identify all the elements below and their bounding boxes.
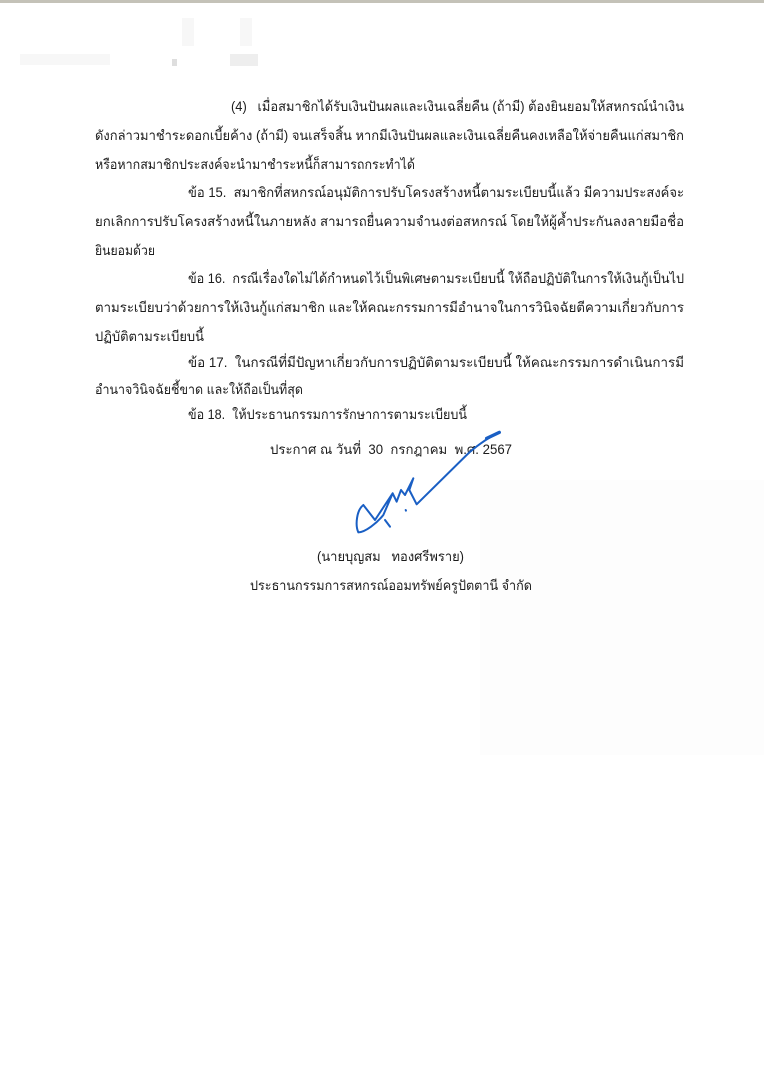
faint show-through marks at top [20,18,258,66]
clause 15: ยินยอมด้วย [95,243,155,258]
scanned page top edge [0,0,764,3]
clause 14 item 4: หรือหากสมาชิกประสงค์จะนำมาชำระหนี้ก็สามารถกระทำได้ [95,154,415,172]
clause 15: ยกเลิกการปรับโครงสร้างหนี้ในภายหลัง สามารถยื่นความจำนงต่อสหกรณ์ โดยให้ผู้ค้ำประกันลงลายมือชื่อ [95,211,684,230]
clause 16: ตามระเบียบว่าด้วยการให้เงินกู้แก่สมาชิก และให้คณะกรรมการมีอำนาจในการวินิจฉัยตีความเกี่ยวกับการ [95,298,684,316]
clause 17: ข้อ 17. ในกรณีที่มีปัญหาเกี่ยวกับการปฏิบัติตามระเบียบนี้ ให้คณะกรรมการดำเนินการมี [188,352,684,370]
faint show-through region [480,480,764,755]
clause 17 [95,352,684,398]
clause 16: ข้อ 16. กรณีเรื่องใดไม่ได้กำหนดไว้เป็นพิเศษตามระเบียบนี้ ให้ถือปฏิบัติในการให้เงินกู้เป็นไป [188,268,684,287]
signer title: ประธานกรรมการสหกรณ์ออมทรัพย์ครูปัตตานี จำกัด [250,577,532,594]
body text: regulation clauses [95,97,684,422]
signature in blue ink [357,432,499,532]
signer name: (นายบุญสม ทองศรีพราย) [317,549,464,565]
clause 16 [95,268,684,344]
clause 14 item 4: ดังกล่าวมาชำระดอกเบี้ยค้าง (ถ้ามี) จนเสร็จสิ้น หากมีเงินปันผลและเงินเฉลี่ยคืนคงเหลือให้จ่ายคืนแก่สมาชิก [95,125,684,143]
clause 17: อำนาจวินิจฉัยชี้ขาด และให้ถือเป็นที่สุด [95,379,303,398]
clause 14 item 4 [95,97,684,172]
clause 18: ข้อ 18. ให้ประธานกรรมการรักษาการตามระเบียบนี้ [188,404,467,422]
clause 14 item 4: (4) เมื่อสมาชิกได้รับเงินปันผลและเงินเฉลี่ยคืน (ถ้ามี) ต้องยินยอมให้สหกรณ์นำเงิน [231,97,684,114]
clause 15: ข้อ 15. สมาชิกที่สหกรณ์อนุมัติการปรับโครงสร้างหนี้ตามระเบียบนี้แล้ว มีความประสงค์จะ [188,182,684,201]
clause 15 [95,182,684,258]
clause 16: ปฏิบัติตามระเบียบนี้ [95,326,204,344]
announcement date: ประกาศ ณ วันที่ 30 กรกฎาคม พ.ศ. 2567 [270,440,512,457]
